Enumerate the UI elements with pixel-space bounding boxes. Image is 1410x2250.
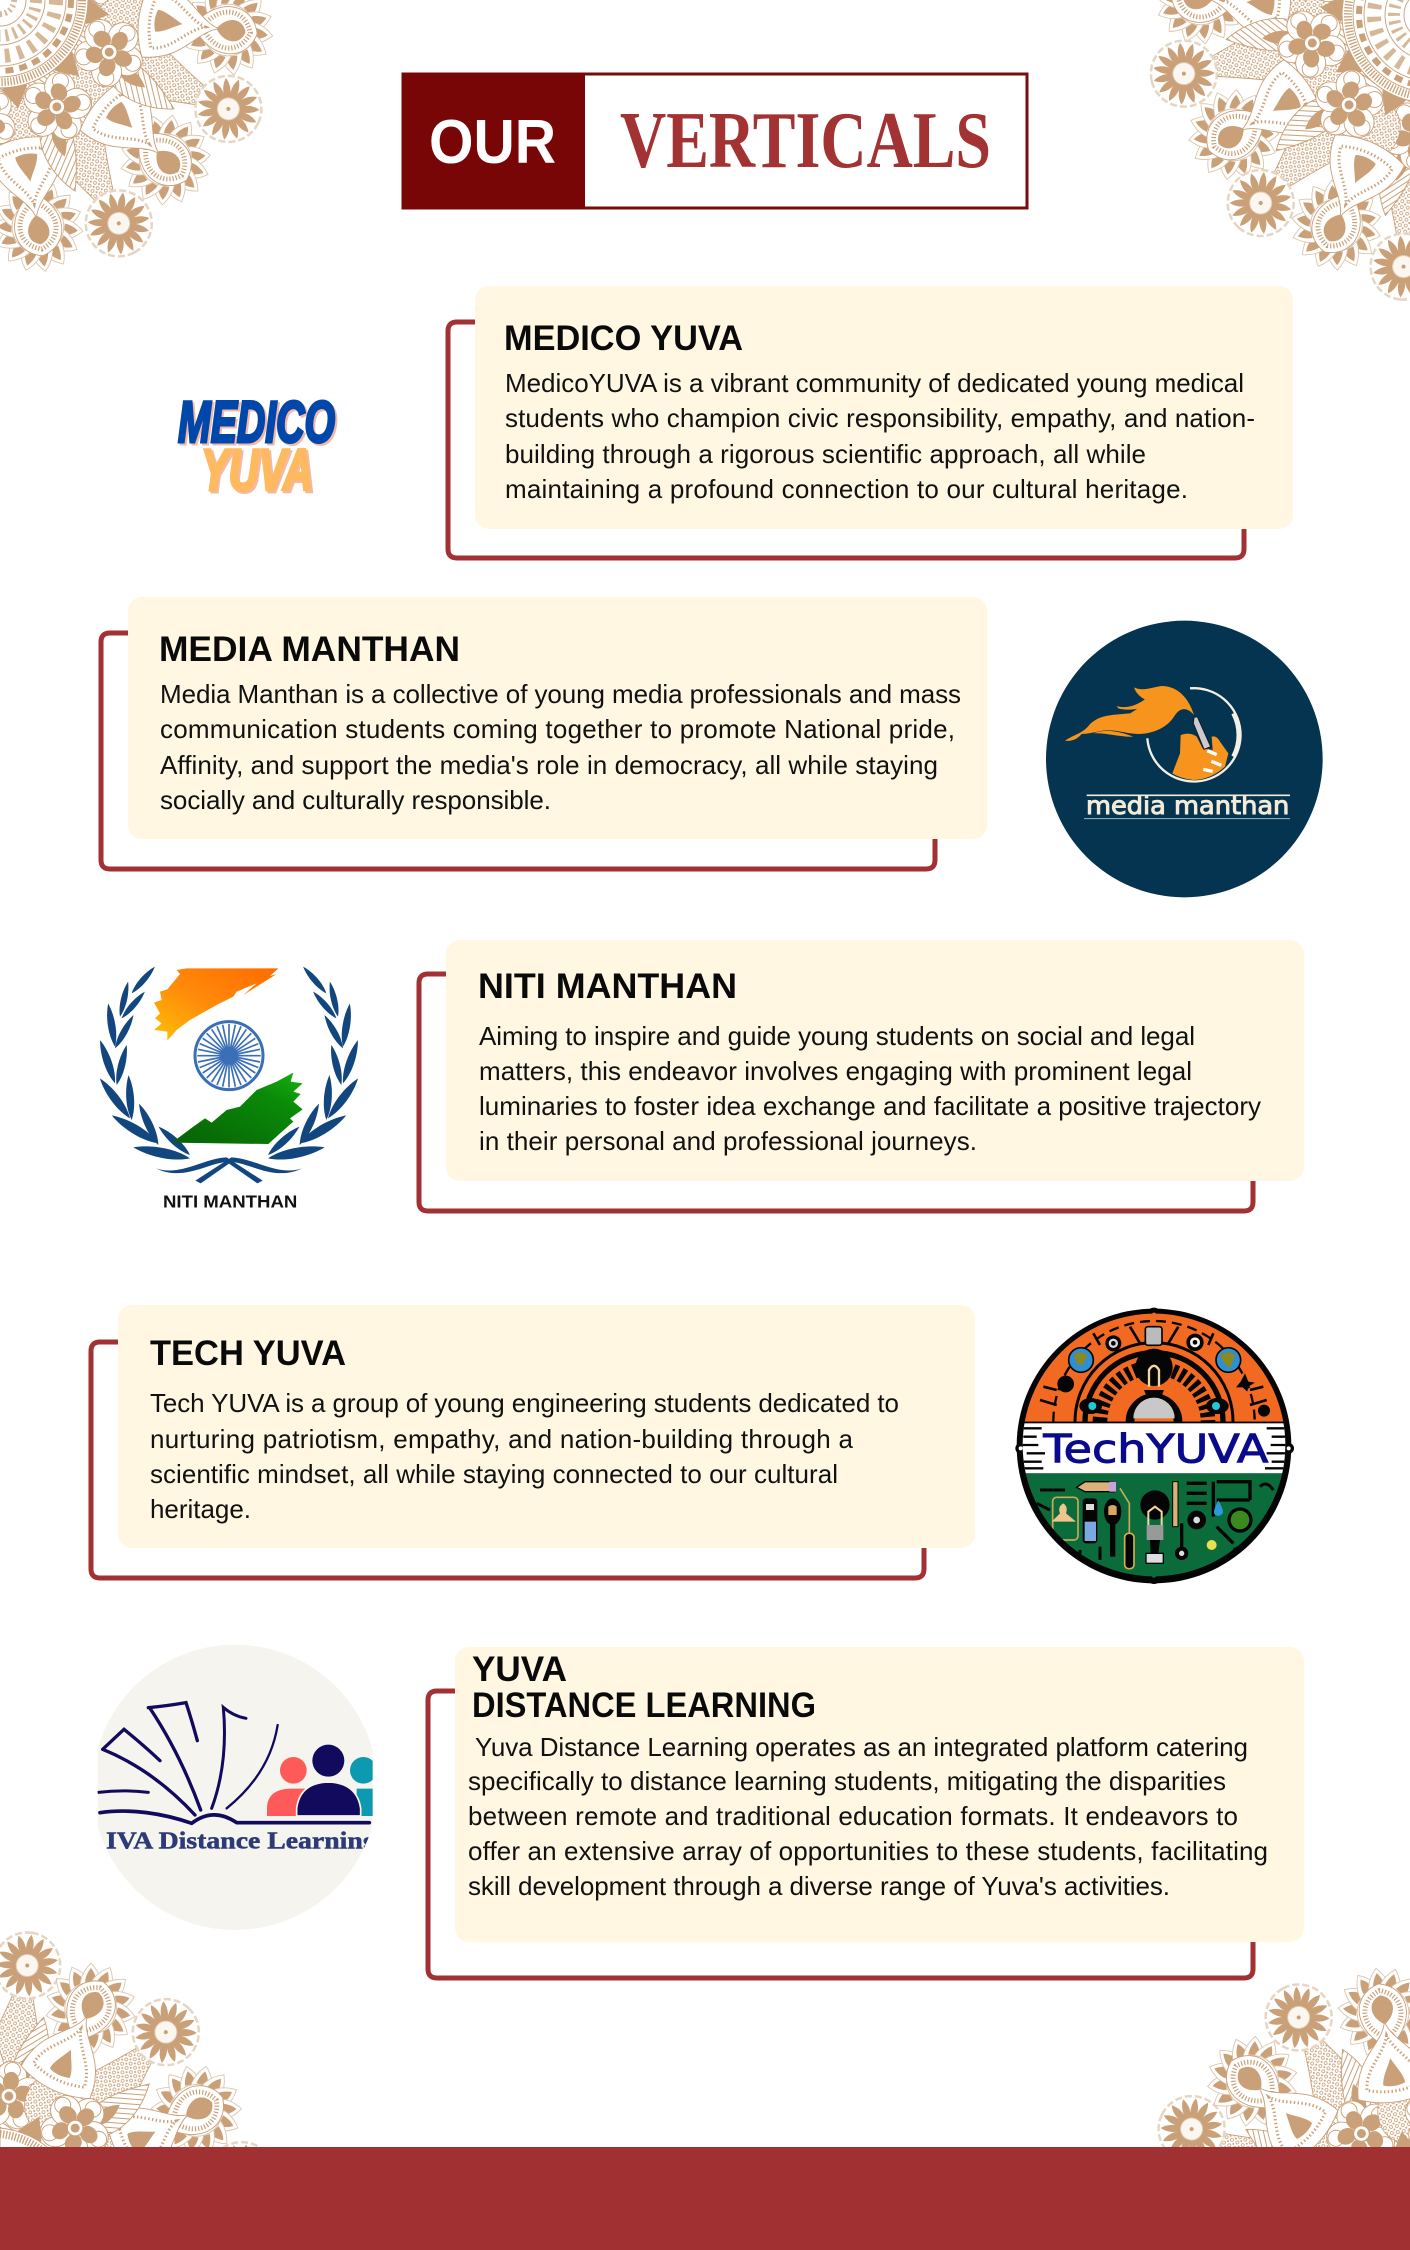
bracket <box>448 322 1244 558</box>
title block: our <box>402 73 585 209</box>
card background <box>475 286 1293 529</box>
panel: yuva distance learning <box>428 1647 1304 1978</box>
body text: MedicoYUVA is a vibrant community of dedicated young medical <box>505 368 1244 398</box>
body text: in their personal and professional journeys. <box>479 1126 977 1156</box>
body text: nurturing patriotism, empathy, and nation-building through a <box>150 1424 854 1454</box>
green brush <box>172 1073 303 1144</box>
card background <box>128 597 987 839</box>
wordmark: TechYUVA <box>1042 1426 1268 1472</box>
logo: niti manthan: NITI MANTHAN <box>163 1191 297 1211</box>
heading <box>472 1650 816 1725</box>
logo: medico yuva <box>178 390 335 503</box>
wordmark: media manthan <box>1086 791 1289 820</box>
logo: yuva distance learning: IVA Distance Learning <box>106 1828 377 1854</box>
wreath <box>96 965 362 1183</box>
body text: between remote and traditional education formats. It endeavors to <box>468 1801 1238 1831</box>
bracket <box>419 974 1253 1211</box>
body text: maintaining a profound connection to our cultural heritage. <box>505 474 1188 504</box>
body text: Media Manthan is a collective of young media professionals and mass <box>160 679 961 709</box>
footer band <box>0 2147 1410 2250</box>
ring <box>1147 688 1241 782</box>
decorative ornament: bottom right <box>1133 1943 1410 2250</box>
white band <box>1020 1423 1290 1473</box>
title word: verticals: VERTICALS <box>620 97 991 185</box>
body text: students who champion civic responsibility, empathy, and nation- <box>505 403 1255 433</box>
heading: NITI MANTHAN <box>478 967 737 1006</box>
body text: communication students coming together to promote National pride, <box>160 714 955 744</box>
body text: socially and culturally responsible. <box>160 785 551 815</box>
green half <box>1020 1473 1290 1580</box>
body text: building through a rigorous scientific approach, all while <box>505 439 1146 469</box>
decorative ornament: top left <box>0 0 305 298</box>
people <box>267 1745 377 1816</box>
title word: our: OUR <box>429 108 556 177</box>
body text: luminaries to foster idea exchange and facilitate a positive trajectory <box>479 1091 1261 1121</box>
logo: niti manthan <box>96 965 362 1211</box>
saffron half <box>1020 1310 1290 1422</box>
body text: scientific mindset, all while staying connected to our cultural <box>150 1459 838 1489</box>
body text: specifically to distance learning students, mitigating the disparities <box>468 1766 1226 1796</box>
title outline box <box>403 74 1027 208</box>
hand with pen <box>1172 717 1228 780</box>
decorative ornament: top right <box>1127 0 1410 316</box>
card background <box>118 1305 975 1548</box>
bracket <box>91 1342 924 1578</box>
body text: Affinity, and support the media's role in democracy, all while staying <box>160 750 938 780</box>
body text: Aiming to inspire and guide young students on social and legal <box>479 1021 1195 1051</box>
body text <box>468 1732 1268 1901</box>
logo: yuva distance learning <box>92 1645 378 1930</box>
bracket <box>428 1691 1253 1978</box>
panel: media manthan <box>101 597 987 869</box>
card background <box>446 940 1304 1181</box>
body text: Yuva Distance Learning operates as an integrated platform catering <box>475 1732 1248 1762</box>
body text: skill development through a diverse range of Yuva's activities. <box>468 1871 1170 1901</box>
logo: media manthan <box>1046 621 1323 897</box>
panel: tech yuva <box>91 1305 975 1578</box>
flame <box>1065 686 1194 741</box>
saffron brush <box>154 968 278 1041</box>
body text: heritage. <box>150 1494 251 1524</box>
panel: medico yuva <box>448 286 1293 558</box>
decorative ornament: bottom left <box>0 1917 298 2250</box>
logo: tech yuva <box>1015 1308 1294 1584</box>
body text <box>479 1021 1261 1156</box>
panel: niti manthan <box>419 940 1304 1211</box>
body text: Tech YUVA is a group of young engineering students dedicated to <box>150 1388 899 1418</box>
bracket <box>101 633 935 869</box>
heading: YUVA <box>472 1650 567 1689</box>
chakra <box>195 1022 263 1090</box>
body text <box>160 679 961 815</box>
body text <box>505 368 1255 504</box>
heading: TECH YUVA <box>150 1334 346 1373</box>
body text: offer an extensive array of opportunities to these students, facilitating <box>468 1836 1268 1866</box>
body text <box>150 1388 899 1524</box>
logo: medico yuva: YUVA <box>201 438 313 503</box>
body text: matters, this endeavor involves engaging with prominent legal <box>479 1056 1192 1086</box>
open book <box>98 1703 369 1823</box>
logo: medico yuva: MEDICO <box>178 390 335 455</box>
card background <box>455 1647 1304 1942</box>
title <box>402 73 1027 209</box>
heading: DISTANCE LEARNING <box>472 1686 816 1725</box>
heading: MEDIA MANTHAN <box>159 630 460 669</box>
heading: MEDICO YUVA <box>504 319 743 358</box>
